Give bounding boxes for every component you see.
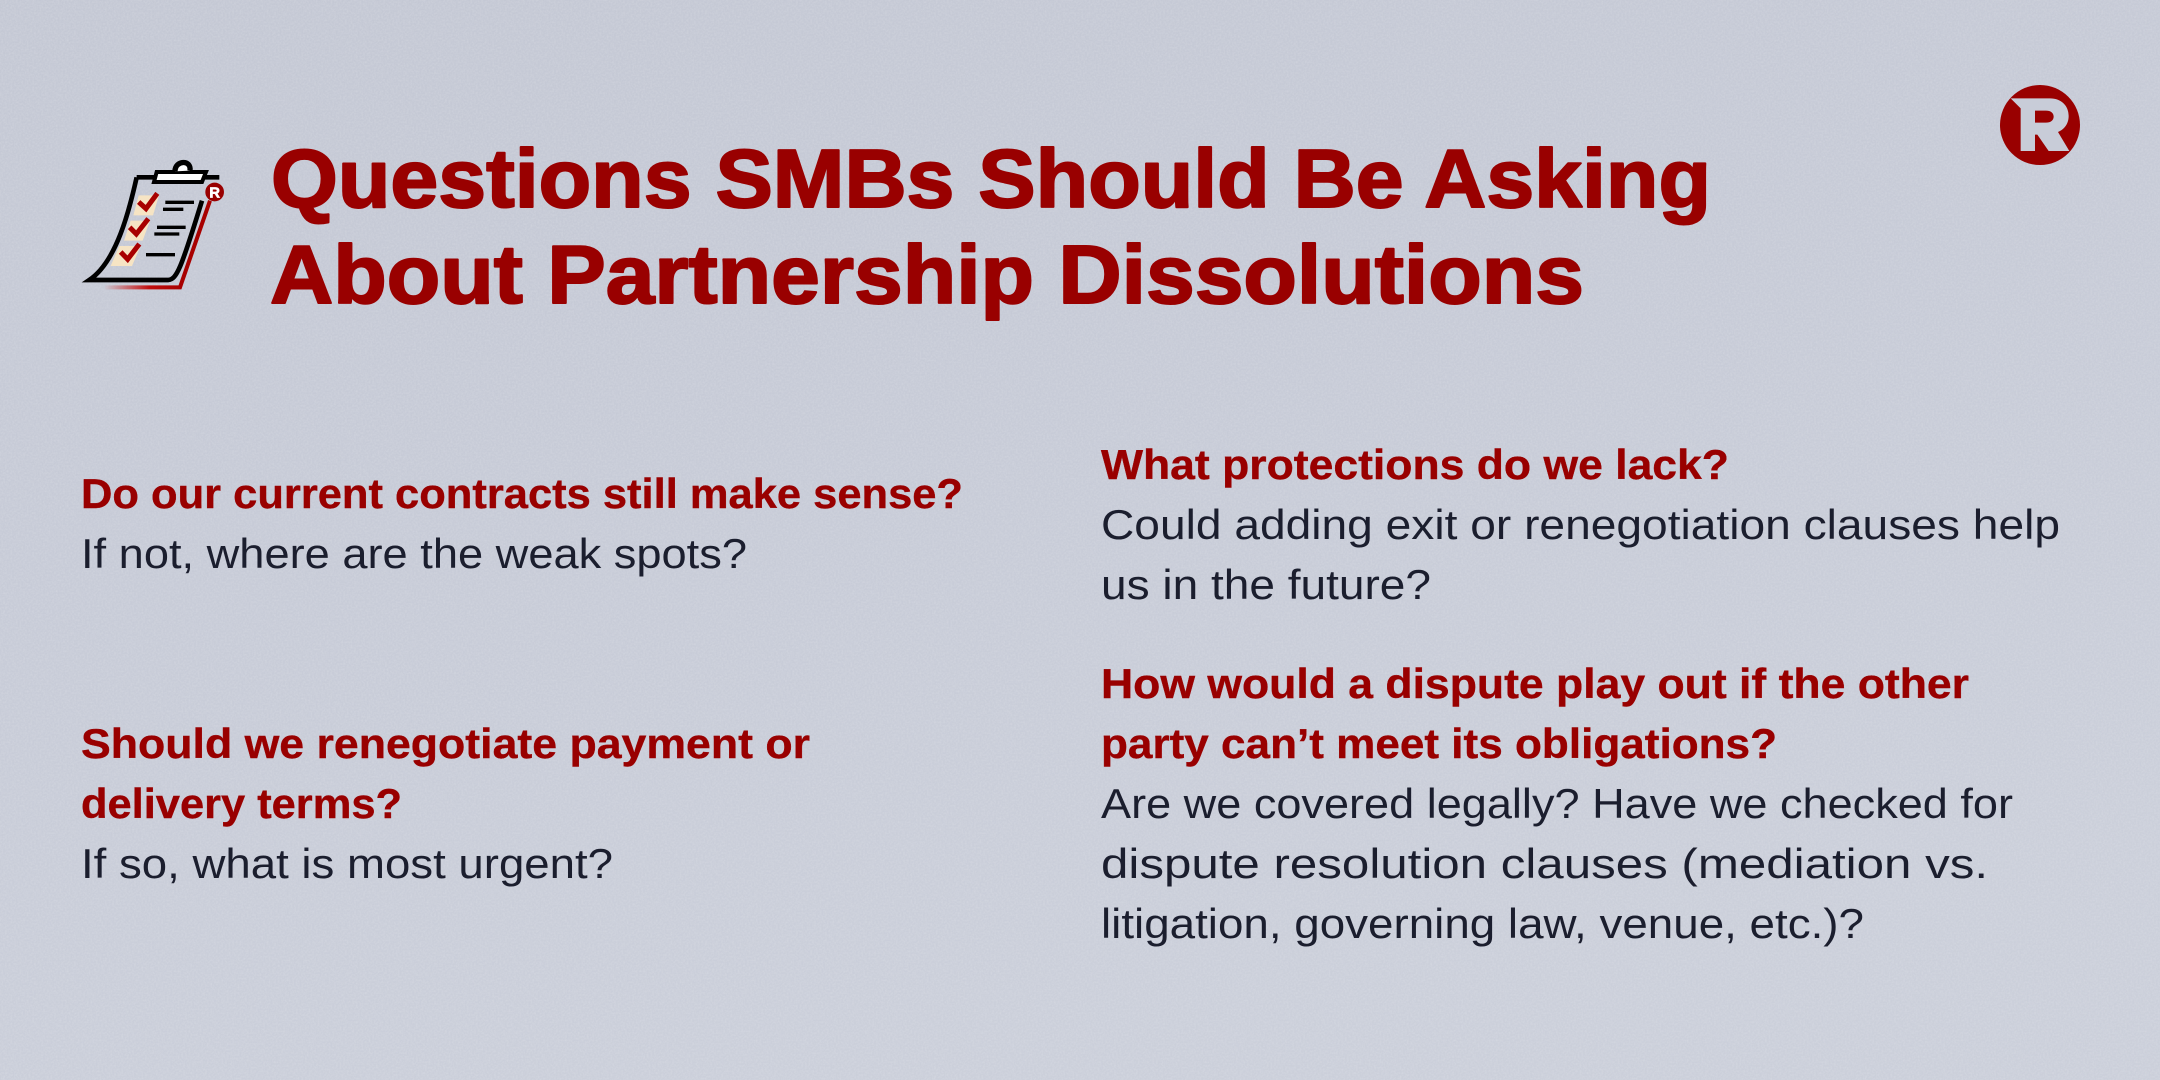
title: Questions SMBs Should Be Asking xyxy=(271,132,1711,225)
question: payment or delivery terms xyxy=(81,720,810,887)
question: protections: What protections do we lack? xyxy=(1101,441,1729,488)
question: dispute: How would a dispute play out if the other xyxy=(1101,660,1969,707)
question: payment or delivery terms: If so, what is most urgent? xyxy=(81,840,613,887)
question: payment or delivery terms: delivery terms? xyxy=(81,780,402,827)
question: dispute: Are we covered legally? Have we checked for xyxy=(1101,780,2013,827)
question: current contracts: Do our current contracts still make sense? xyxy=(81,470,963,517)
title xyxy=(270,132,1711,321)
question: dispute: litigation, governing law, venue, etc.)? xyxy=(1101,900,1864,947)
question: current contracts: If not, where are the weak spots? xyxy=(81,530,747,577)
question: protections: Could adding exit or renegotiation clauses help xyxy=(1101,501,2060,548)
title: About Partnership Dissolutions xyxy=(270,228,1584,321)
icon: clipboard checklist: R xyxy=(209,185,220,201)
question: dispute: party can’t meet its obligations? xyxy=(1101,720,1777,767)
question: protections xyxy=(1101,441,2060,608)
question: payment or delivery terms: Should we renegotiate payment or xyxy=(81,720,810,767)
logo: R badge xyxy=(2000,85,2080,165)
question: dispute xyxy=(1101,660,2013,947)
question: dispute: dispute resolution clauses (mediation vs. xyxy=(1101,840,1988,887)
question: protections: us in the future? xyxy=(1101,561,1431,608)
icon: clipboard checklist xyxy=(89,162,224,287)
question: current contracts xyxy=(81,470,963,577)
